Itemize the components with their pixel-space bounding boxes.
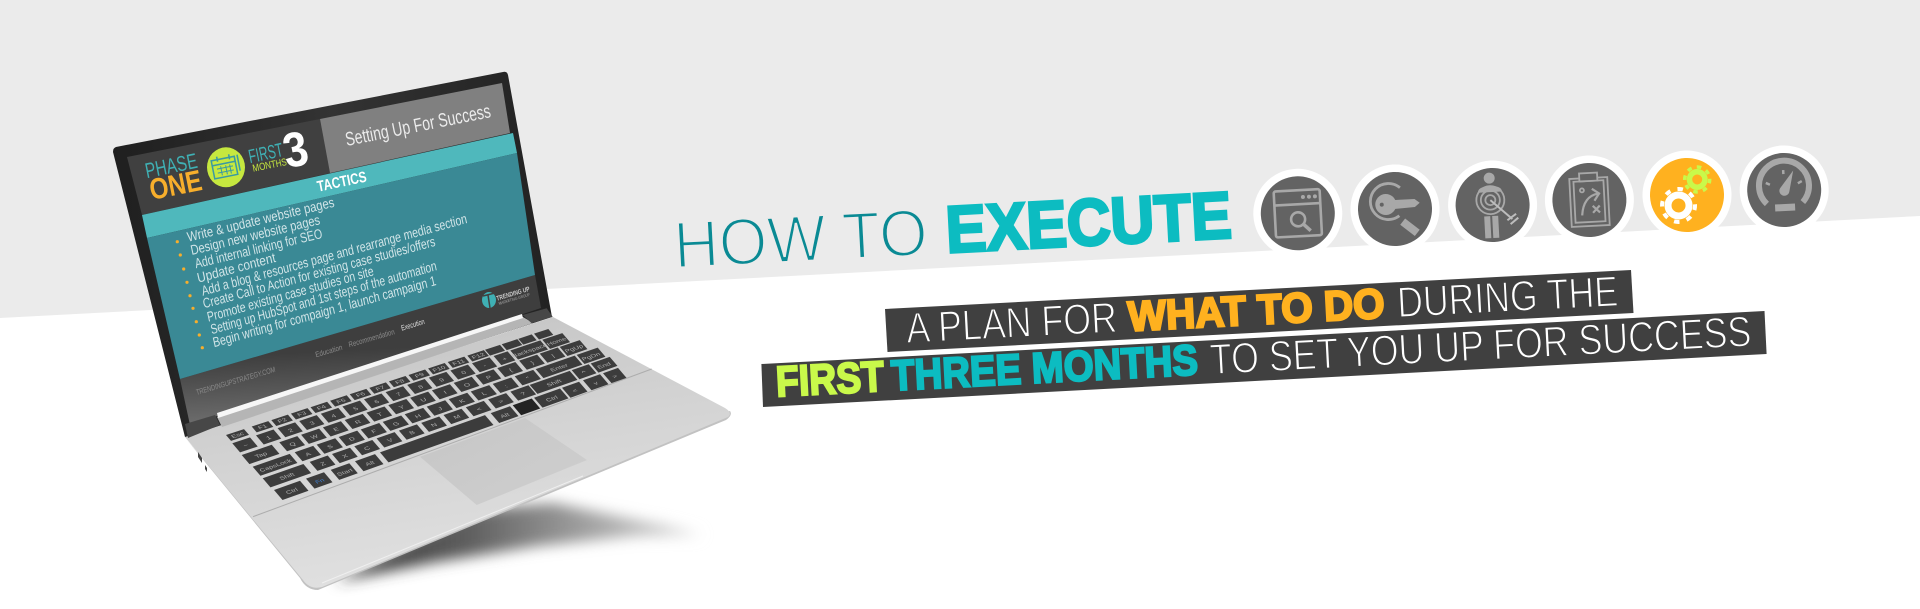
key row: function: F3 [296,411,309,418]
key row: function: F7 [375,385,387,392]
icon row [1251,143,1831,260]
key row: bottom [274,368,626,500]
slide footer nav: Execution [400,317,425,333]
phase label [143,149,205,207]
key row: bottom: v [593,380,601,386]
key row: numbers: 6 [373,399,381,405]
key row: home: K [458,398,467,404]
key row: function: F12 [471,352,487,361]
tactics list: Update content [196,249,277,286]
key row: home: CapsLock [258,458,294,473]
subtitle line 2: FIRST [775,353,885,406]
key row: home: A [304,451,313,458]
key row: function: F4 [316,404,328,411]
first months 3 [247,121,313,179]
key row: numbers: 7 [395,392,403,398]
slide header left [127,119,330,215]
trackpad [420,418,587,505]
hinge silver bar [217,317,533,427]
laptop lid [113,72,553,438]
icon: gears [1640,148,1734,242]
key row: shift: B [408,430,417,436]
key row: numbers: 3 [309,421,317,426]
key row: shift: Z [319,461,327,467]
tactics heading: TACTICS [316,169,368,196]
key row: shift: C [363,446,372,452]
key row: numbers: + [501,356,509,362]
key row: qwerty: { [508,368,515,373]
key row: home: Enter [549,363,571,373]
key row: qwerty: E [332,427,342,433]
key row: function: F8 [394,378,407,386]
key row: qwerty: R [354,419,363,425]
key row: numbers [232,333,570,452]
key row: home: D [348,436,357,442]
phase label: ONE [147,164,205,207]
key row: home: F [370,429,378,435]
keyboard [226,329,626,500]
key row: home: " [525,376,532,381]
key row: bottom: Start [336,468,355,477]
heading: how to execute [672,178,1233,282]
key row: home: PgDn [581,352,602,362]
key row: shift [263,357,617,487]
key row: shift: Shift [279,472,296,481]
key row: shift: N [430,422,439,428]
slide footer nav: Recommendation [348,327,395,349]
key row: numbers: 4 [330,413,338,419]
key row: home: L [481,391,489,397]
first months 3: FIRST [247,139,285,168]
subtitle bar 1 [885,270,1634,352]
slide band [142,133,517,238]
key row: qwerty: T [376,412,384,418]
front edge highlight [322,476,583,583]
tactics list: Begin writing for compaign 1, launch campaign 1 [211,272,438,350]
key row: qwerty: Q [288,442,298,448]
key row: shift: V [386,437,395,444]
icon: person target [1446,158,1539,252]
heading: how to execute: HOW TO [672,195,929,282]
subtitle line 2: THREE MONTHS [890,336,1199,400]
ports [198,452,207,472]
key row: function: Esc [230,431,246,440]
laptop [113,72,731,590]
key row: qwerty: Tap [254,451,269,460]
icon: speedometer [1737,143,1831,237]
tactics list: Add internal linking for SEO [193,225,324,271]
key row: bottom: Ctrl [545,395,560,403]
tactics list: Add a blog & resources page and rearrange media section [200,210,468,299]
key row: numbers: 2 [287,428,295,434]
key row: numbers: 1 [265,435,273,441]
subtitle line 1: A PLAN FOR [905,294,1118,353]
deck seam [253,369,652,517]
icon: key search [1348,162,1442,256]
key row: shift: ^ [581,370,588,376]
key row: qwerty: | [551,353,557,359]
key row: function: F11 [451,359,467,367]
key row: function: F9 [414,372,426,379]
key row: home: H [414,413,423,420]
key row: home: J [437,406,444,412]
laptop base [185,317,731,590]
key row: bottom: > [611,374,619,380]
slide title: Setting Up For Success [343,100,493,151]
key row: qwerty: U [419,397,429,403]
subtitle line 1 [905,268,1619,353]
slide logo [482,286,531,308]
key row: qwerty: Y [398,404,407,411]
slide header right [320,83,510,173]
key row: home [253,348,605,476]
key row: numbers: 0 [460,370,468,376]
key row: numbers: 8 [417,384,425,390]
subtitle line 2 [775,308,1752,406]
hinge white strip [217,314,523,418]
key row: function [226,329,553,441]
key row: home: : [504,384,509,389]
key row: numbers: Home [546,336,569,347]
slide footer nav: Education [315,343,343,359]
key row: function: F6 [355,391,367,399]
key row: function: F10 [431,365,448,373]
icon: clipboard plan [1543,153,1636,247]
key row: function: F5 [335,398,348,405]
key row: shift: > [497,399,506,405]
heading: how to execute: EXECUTE [944,178,1233,266]
key row: function: F1 [257,424,269,431]
phase label: PHASE [143,149,199,183]
subtitle line 2: TO SET YOU UP FOR SUCCESS [1209,308,1752,384]
bullet dots [176,240,204,349]
key row: numbers: - [482,363,488,369]
key row: home: G [392,421,401,427]
slide logo: TRENDING UP [496,286,531,303]
icon: browser search [1251,167,1345,260]
key row: home: S [326,444,335,450]
background: grey upper band [0,0,1920,318]
slide body [147,153,535,379]
key row: qwerty: O [463,382,472,388]
key row: qwerty: } [530,360,537,366]
slide [127,83,535,397]
icon: calendar [207,147,245,187]
slide footer nav: TRENDINGUPSTRATEGY.COM [195,365,276,397]
key row: bottom: Fn [314,478,327,485]
slide logo: MARKETING GROUP [498,292,530,306]
first months 3: 3 [278,121,313,179]
key row: numbers: 9 [438,377,446,383]
subtitle bar 2 [761,311,1767,407]
key row: shift: ? [520,391,528,397]
key row: qwerty: P [485,375,493,381]
tactics list [186,194,468,350]
lid bezel [113,72,552,437]
tactics list: Promote existing case studies on site [206,263,375,325]
key row: function: F2 [277,417,289,424]
key row: qwerty: PgUp [564,344,585,354]
left hinge [185,415,220,438]
key row: shift: X [341,453,350,460]
key row: qwerty: W [310,434,321,441]
base deck [185,317,730,588]
key row: bottom: Alt [499,412,511,420]
first months 3: MONTHS [252,157,288,175]
slide footer nav [195,317,425,397]
key row: qwerty: I [443,390,449,395]
key row: shift: End [596,361,613,370]
key row: shift: M [453,414,462,421]
key row: bottom: Alt [364,460,376,467]
key row: numbers: 5 [352,406,360,412]
subtitle line 1: DURING THE [1396,268,1619,327]
key row: numbers: Backspace [511,343,549,359]
right hinge [523,308,553,323]
base underside rim [187,411,731,590]
key row: numbers: ~ [242,443,250,449]
laptop shadow [335,503,703,582]
lid lower band [180,275,541,425]
subtitle banner [761,268,1767,407]
key row: shift: < [475,407,484,413]
key row: bottom: Ctrl [285,487,300,496]
tactics list: Create Call to Action for existing case studies/offers [201,233,437,311]
tactics list: Write & update website pages [186,194,336,245]
tactics list: Setting up HubSpot and 1st steps of the automation [209,257,438,337]
key row: bottom: < [571,388,579,394]
key row: shift: Shift [546,379,563,388]
subtitle line 1: WHAT TO DO [1127,280,1386,340]
key row: qwerty [242,340,587,464]
tactics list: Design new website pages [189,211,321,258]
